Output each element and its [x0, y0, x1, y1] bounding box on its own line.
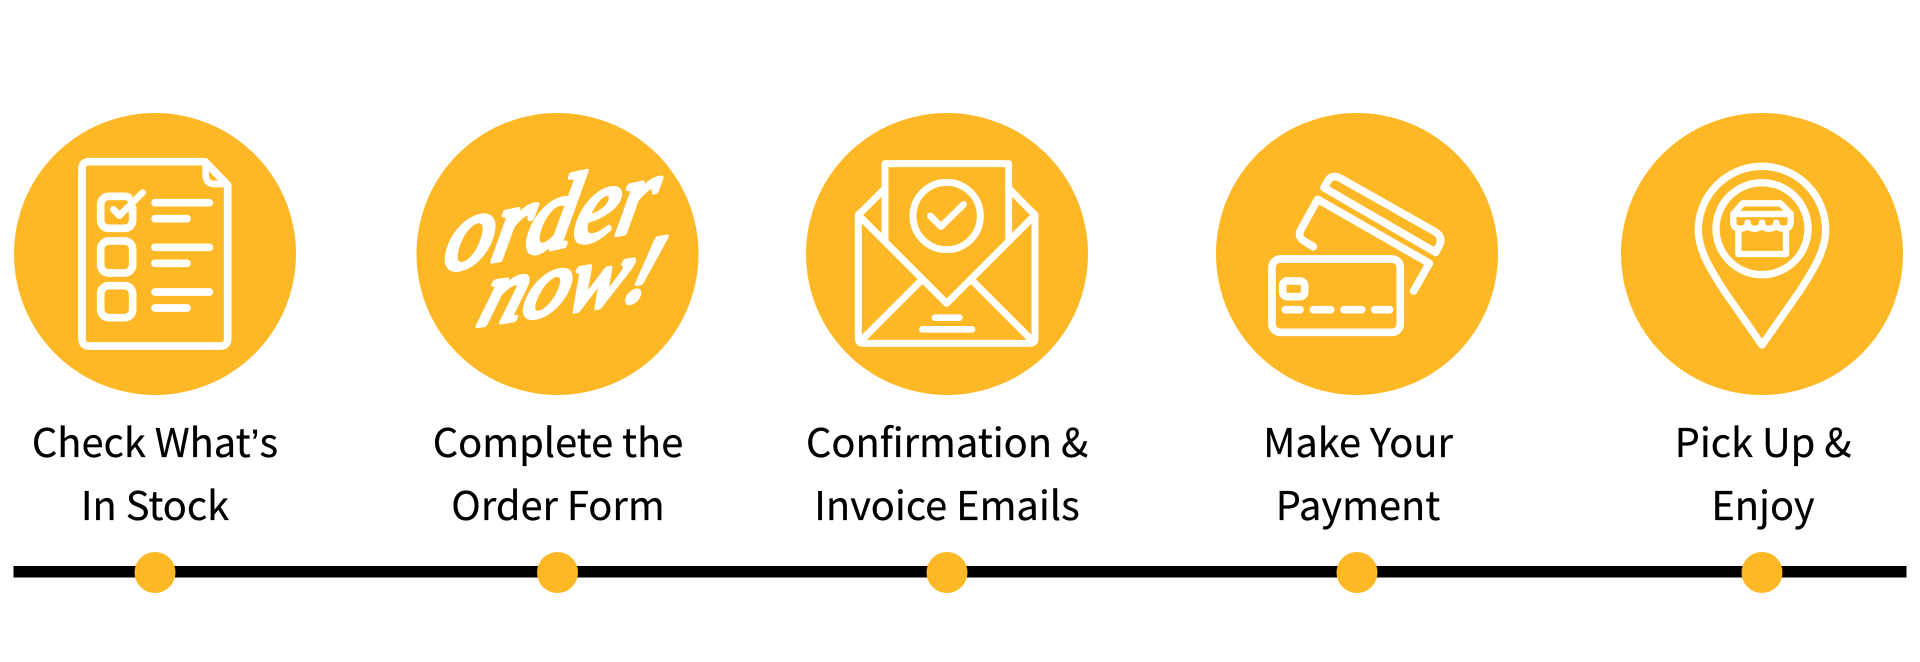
- label: complete the order form: Order Form: [451, 475, 665, 532]
- step 2 circle: complete the order form: [416, 113, 698, 395]
- label: pick up and enjoy: Enjoy: [1711, 475, 1815, 532]
- label: make your payment: Make Your: [1263, 412, 1453, 469]
- label: confirmation and invoice emails: Invoice Emails: [814, 475, 1080, 532]
- label: complete the order form: Complete the: [433, 412, 683, 469]
- label: confirmation and invoice emails: Confirmation &: [806, 412, 1088, 469]
- timeline markers: [134, 552, 1782, 593]
- step 1 circle: check what's in stock: [14, 113, 296, 395]
- step 4 circle: make your payment: [1216, 113, 1498, 395]
- label: make your payment: Payment: [1276, 475, 1440, 532]
- icon: order now brush lettering: now!: [468, 215, 677, 347]
- label: pick up and enjoy: Pick Up &: [1675, 412, 1851, 469]
- step 5 circle: pick up and enjoy: [1621, 113, 1903, 395]
- icon: open envelope with confirmation letter: [858, 164, 1035, 343]
- step 3 circle: confirmation and invoice emails: [806, 113, 1088, 395]
- icon: checklist document: [82, 162, 228, 346]
- icon: map pin with storefront: [1698, 166, 1826, 345]
- label: check what's in stock: Check What’s: [32, 412, 278, 469]
- label: check what's in stock: In Stock: [81, 475, 229, 532]
- timeline line: [14, 566, 1906, 578]
- icon: credit cards: [1272, 176, 1441, 332]
- icon: order now brush lettering: order: [436, 134, 671, 295]
